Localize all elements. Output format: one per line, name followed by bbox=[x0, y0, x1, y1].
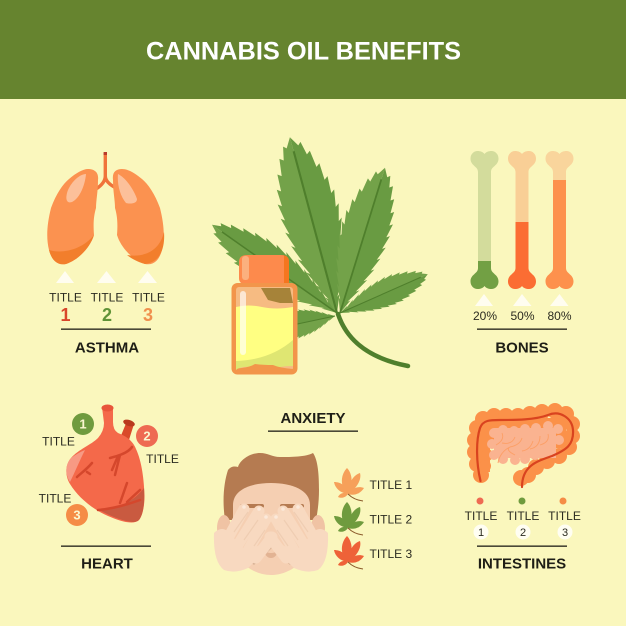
title: CANNABIS OIL BENEFITS bbox=[146, 38, 461, 66]
percent labels: 20% bbox=[473, 309, 497, 323]
numbered badges: 1 bbox=[478, 527, 484, 539]
icon: oil bottle bbox=[232, 255, 298, 374]
right hand bbox=[270, 505, 328, 572]
marker 3: 3 bbox=[73, 508, 81, 522]
marker 2 bbox=[136, 425, 158, 447]
percent labels bbox=[473, 309, 572, 323]
label: title 2: TITLE 2 bbox=[370, 512, 413, 526]
percent labels: 50% bbox=[510, 309, 535, 323]
label: title 1: TITLE 1 bbox=[370, 478, 413, 492]
labels: titles bbox=[465, 509, 581, 523]
numbers 1 2 3: 2 bbox=[102, 305, 112, 325]
icon: red leaf bbox=[334, 536, 364, 569]
labels: titles bbox=[49, 290, 165, 304]
labels: titles: TITLE bbox=[548, 509, 581, 523]
label: title 3: TITLE 3 bbox=[370, 547, 413, 561]
panel: cannabis leaf and oil bottle bbox=[200, 129, 434, 374]
numbers 1 2 3 bbox=[60, 305, 153, 325]
bone: 20% bbox=[470, 151, 498, 289]
heading: intestines: INTESTINES bbox=[478, 556, 566, 572]
bone: 80% bbox=[546, 151, 574, 289]
labels: titles: TITLE bbox=[507, 509, 539, 523]
panel: heart bbox=[39, 404, 179, 572]
markers: dots bbox=[476, 498, 566, 504]
heading: anxiety: ANXIETY bbox=[280, 410, 346, 427]
marker 1: 1 bbox=[79, 416, 87, 432]
heading: bones: BONES bbox=[495, 340, 549, 356]
panel: bones bbox=[470, 151, 574, 356]
panel: anxiety bbox=[214, 410, 413, 575]
icon: lungs bbox=[47, 152, 164, 264]
icon: cannabis leaf bbox=[200, 129, 434, 366]
heart labels: TITLE bbox=[42, 434, 75, 448]
marker 2: 2 bbox=[143, 428, 151, 444]
percent labels: 80% bbox=[547, 309, 572, 323]
heart labels: TITLE bbox=[146, 452, 179, 466]
heading: asthma: ASTHMA bbox=[75, 340, 139, 356]
heart labels bbox=[39, 434, 179, 506]
numbered badges: 3 bbox=[562, 527, 568, 539]
labels: titles: TITLE bbox=[465, 509, 497, 523]
labels: titles: TITLE bbox=[91, 290, 123, 304]
numbered badges: 2 bbox=[520, 527, 526, 539]
markers: triangles bbox=[475, 294, 568, 306]
icon: man covering face bbox=[214, 453, 328, 575]
markers: triangles bbox=[56, 271, 157, 283]
marker 1 bbox=[72, 413, 94, 435]
icon: heart bbox=[66, 404, 144, 523]
numbered badges bbox=[474, 524, 572, 540]
heart labels: TITLE bbox=[39, 492, 71, 506]
bone: 50% bbox=[508, 151, 536, 289]
numbers 1 2 3: 1 bbox=[60, 305, 71, 325]
marker 3 bbox=[66, 504, 88, 526]
panel: asthma bbox=[47, 152, 165, 356]
labels: titles: TITLE bbox=[132, 290, 165, 304]
heading: heart: HEART bbox=[81, 556, 133, 572]
icon: intestines bbox=[467, 403, 580, 487]
panel: intestines bbox=[465, 403, 581, 572]
numbers 1 2 3: 3 bbox=[143, 305, 153, 325]
header band bbox=[0, 0, 626, 99]
left hand bbox=[214, 505, 273, 572]
icon: green leaf bbox=[334, 502, 364, 535]
labels: titles: TITLE bbox=[49, 290, 82, 304]
icon: orange leaf bbox=[334, 468, 364, 501]
